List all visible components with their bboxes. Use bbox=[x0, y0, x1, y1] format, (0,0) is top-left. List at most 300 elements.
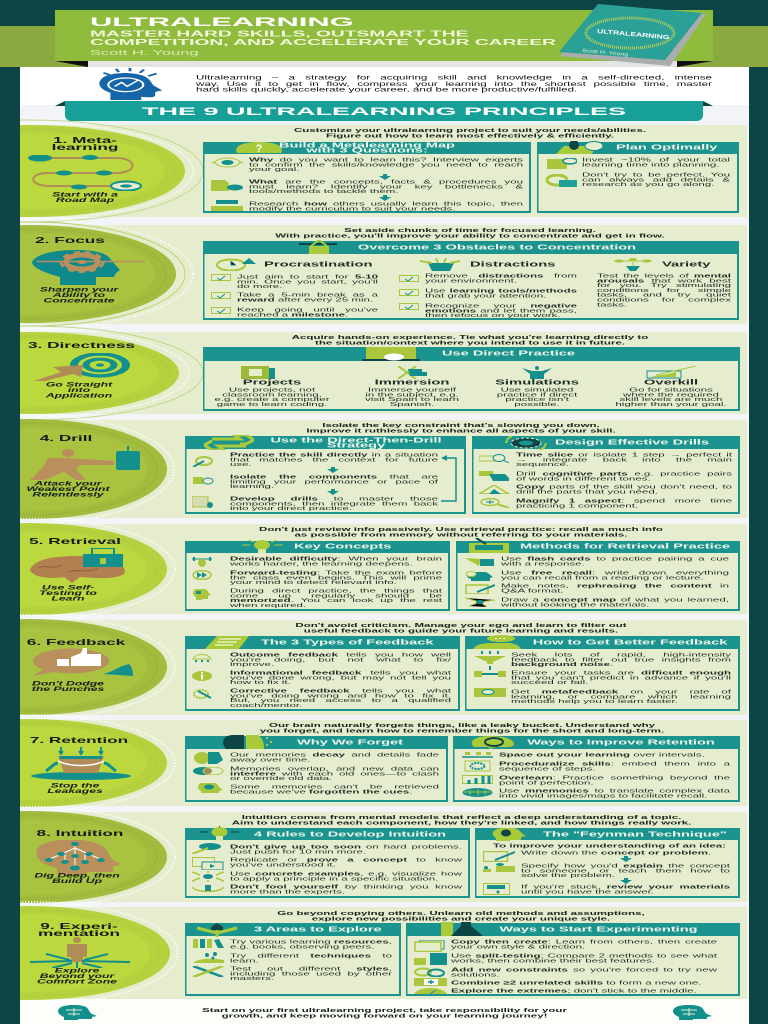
concept bbox=[230, 570, 442, 585]
icon: video screens bbox=[192, 857, 224, 870]
rule bbox=[230, 872, 462, 881]
icon: laptop and hand bbox=[362, 347, 420, 361]
arrow bbox=[379, 195, 391, 201]
drill tip bbox=[516, 472, 732, 481]
why: to confirm the skills/knowledge you need to reach bbox=[249, 161, 523, 167]
icon: triangle bbox=[479, 485, 510, 494]
icon: recall head bbox=[465, 571, 495, 581]
why: Why do you want to learn this? Interview experts bbox=[249, 156, 523, 162]
caption: Road Map bbox=[56, 197, 114, 204]
concept: the class even begins. This will prime bbox=[230, 574, 442, 580]
panel title: Overcome 3 Obstacles to Concentration bbox=[358, 243, 636, 251]
isolate step: limiting your performance or pace of bbox=[230, 478, 438, 484]
step: Write down the concept or problem. bbox=[521, 850, 711, 856]
section summary: the situation/context where you intend to use it in future. bbox=[315, 340, 625, 346]
tip: that grab your attention. bbox=[425, 292, 546, 298]
icon: immersion bbox=[396, 366, 427, 379]
rule bbox=[230, 884, 462, 894]
subtitle bbox=[90, 29, 556, 47]
projects heading: Projects bbox=[243, 378, 301, 386]
icon: isolate bbox=[193, 476, 215, 486]
research: Research how others usually learn this topic, then bbox=[249, 200, 523, 206]
method: with a response. bbox=[501, 560, 585, 566]
caption bbox=[0, 783, 155, 795]
tip: methods help you to learn faster. bbox=[511, 698, 678, 704]
icon: gear steps bbox=[462, 760, 493, 772]
drill tip: Magnify 1 aspect: spend more time bbox=[516, 498, 732, 504]
overkill heading: Overkill bbox=[644, 378, 698, 386]
panel title: Use the Direct-Then-Drill bbox=[270, 436, 442, 444]
icon: thumbs up bubble bbox=[33, 648, 133, 676]
area: masters. bbox=[230, 975, 274, 981]
section summary: Acquire hands-on experience. Tie what you're learning directly to bbox=[292, 335, 648, 341]
icon: dial bbox=[414, 988, 447, 994]
area bbox=[230, 954, 392, 963]
principle title: 5. Retrieval bbox=[29, 536, 121, 545]
area: Try different techniques to bbox=[230, 952, 392, 958]
practice step: Practice the skill directly in a situation bbox=[230, 452, 438, 458]
tip bbox=[511, 652, 731, 667]
method: Use free recall: write down everything bbox=[501, 570, 729, 576]
reason: because we've forgotten the cues. bbox=[230, 788, 412, 794]
perfection: can always add details & bbox=[582, 177, 730, 183]
arrow bbox=[620, 856, 632, 862]
panel: retrieval methods bbox=[456, 541, 740, 611]
invest: Invest ~10% of your total bbox=[582, 156, 730, 162]
way bbox=[451, 940, 717, 949]
caption bbox=[0, 481, 148, 498]
book cover: ULTRALEARNING bbox=[597, 27, 670, 41]
method: point of perfection. bbox=[499, 779, 594, 785]
icon: boxer and bag bbox=[30, 446, 140, 480]
rule: Don't give up too soon on hard problems. bbox=[230, 844, 462, 850]
drill tip: Copy parts of the skill you don't need, to bbox=[516, 484, 732, 490]
simulations text: practice if direct bbox=[497, 391, 577, 397]
icon: test sheet bbox=[468, 538, 510, 553]
feedback type: improve. bbox=[230, 661, 274, 667]
feedback type: But, you need access to a qualified bbox=[230, 697, 451, 703]
section summary: Don't avoid criticism. Manage your ego and learn to filter out bbox=[295, 623, 627, 629]
tip: Remove distractions from bbox=[425, 272, 577, 278]
caption: Dig Deep, then bbox=[34, 872, 120, 879]
method: Q&A format. bbox=[501, 587, 564, 593]
icon: plant bbox=[299, 240, 337, 254]
icon: document bbox=[211, 180, 243, 191]
tip bbox=[237, 292, 378, 303]
section summary: Our brain naturally forgets things, like a leaky bucket. Understand why bbox=[269, 723, 655, 729]
tip: Just aim to start for 5-10 bbox=[237, 274, 378, 280]
principle 3: directness bbox=[20, 332, 747, 414]
variety text: tasks. bbox=[597, 301, 627, 307]
tip: feedback to filter out true insights from bbox=[511, 656, 731, 662]
why: your goal. bbox=[249, 166, 300, 172]
drill tip bbox=[516, 452, 732, 467]
panel title bbox=[279, 141, 455, 154]
lead-in: To improve your understanding of an idea: bbox=[493, 842, 726, 848]
section summary bbox=[294, 128, 646, 139]
area: e.g. books, observing peers. bbox=[230, 943, 374, 949]
projects text: game to learn coding. bbox=[217, 401, 327, 407]
section summary: Aim to understand each component, how they're linked, and how things really work. bbox=[232, 820, 691, 826]
caption bbox=[0, 968, 157, 985]
panel: obstacles to concentration bbox=[203, 241, 739, 320]
simulations text: possible. bbox=[514, 401, 560, 407]
simulations text bbox=[472, 388, 602, 407]
icon: simulations bbox=[520, 366, 554, 379]
reason: interfere with each old ones—to clash bbox=[230, 770, 439, 776]
feedback type: you've doing wrong and how to fix it. bbox=[230, 692, 451, 698]
heading: Procrastination bbox=[264, 260, 373, 268]
rule bbox=[230, 858, 462, 867]
closing message bbox=[134, 1008, 634, 1018]
section summary: useful feedback to guide your future learning and results. bbox=[304, 628, 618, 634]
method bbox=[499, 762, 730, 771]
invest: learning time into planning. bbox=[582, 161, 719, 167]
icon: balancing person bbox=[192, 885, 224, 893]
step bbox=[521, 864, 730, 878]
isolate step: Isolate the components that are bbox=[230, 474, 438, 480]
tip: Recognize your negative bbox=[425, 302, 577, 308]
checkbox bbox=[211, 292, 231, 299]
projects text: e.g. create a computer bbox=[214, 396, 330, 402]
caption bbox=[52, 191, 118, 204]
tip: background noise. bbox=[511, 661, 613, 667]
drill tip: sequence. bbox=[516, 461, 569, 467]
icon: cycle arrows bbox=[204, 435, 254, 450]
research bbox=[249, 200, 523, 212]
variety text: tasks, and try quiet bbox=[597, 292, 731, 298]
section summary: Customize your ultralearning project to suit your needs/abilities. bbox=[294, 128, 646, 134]
caption bbox=[0, 585, 148, 602]
icon: split test bbox=[414, 953, 447, 965]
panel: improve retention bbox=[453, 736, 740, 802]
caption: Explore bbox=[55, 967, 99, 974]
icon: basket bbox=[420, 258, 460, 271]
panel title: Why We Forget bbox=[297, 738, 403, 746]
tip bbox=[425, 304, 577, 318]
principle 6: feedback bbox=[20, 620, 747, 715]
tip: min. Once you start, you'll bbox=[237, 278, 378, 284]
icon: copy bbox=[414, 940, 447, 952]
reason: away over time. bbox=[230, 756, 311, 762]
feedback type bbox=[230, 688, 451, 708]
panel title: Design Effective Drills bbox=[555, 438, 709, 446]
icon: brain bbox=[462, 788, 493, 798]
intro text: way. Use it to get in flow, compress your learning into the shortest possible time, master bbox=[196, 80, 712, 87]
tip: then refocus on your work. bbox=[425, 312, 561, 318]
principle 9: experimentation bbox=[20, 907, 747, 999]
tip: emotions and let them pass, bbox=[425, 307, 577, 313]
icon: target bbox=[212, 158, 243, 168]
caption bbox=[0, 681, 148, 693]
caption: Use Self- bbox=[42, 584, 94, 591]
checkbox bbox=[399, 303, 419, 310]
panel: areas to explore bbox=[185, 923, 401, 996]
icon: cognitive parts bbox=[479, 471, 510, 481]
drill tip: Time slice or isolate 1 step → perfect it bbox=[516, 452, 732, 458]
icon: fast forward bbox=[192, 570, 212, 580]
icon: lightbulb bbox=[200, 826, 239, 841]
tip: Seek lots of rapid, high-intensity bbox=[511, 652, 731, 658]
feedback type: Corrective feedback tells you what bbox=[230, 688, 451, 694]
step: Specify how you'd explain the concept bbox=[521, 862, 730, 868]
icon: overlap bbox=[193, 767, 224, 775]
method bbox=[499, 776, 730, 785]
rule: more than the experts. bbox=[230, 888, 345, 894]
caption: Learn bbox=[51, 596, 85, 603]
rule: Just push for 10 min more. bbox=[230, 848, 366, 854]
panel title bbox=[256, 438, 456, 448]
reason: Some memories can't be retrieved bbox=[230, 784, 439, 790]
perfection bbox=[582, 172, 730, 188]
icon: projects bbox=[241, 366, 275, 379]
drill tip: drill the parts that you need. bbox=[516, 488, 658, 494]
section summary bbox=[275, 228, 665, 239]
section summary bbox=[220, 335, 720, 346]
caption: Comfort Zone bbox=[37, 979, 117, 986]
rule: Replicate or prove a concept to know bbox=[230, 856, 462, 862]
concept bbox=[230, 588, 442, 608]
method: Space out your learning over intervals. bbox=[499, 752, 705, 758]
icon: overkill bbox=[646, 366, 696, 379]
drill tip: of words in different tones. bbox=[516, 475, 651, 481]
area: including those used by other bbox=[230, 970, 392, 976]
book cover bbox=[559, 4, 706, 66]
icon: books bbox=[193, 939, 224, 948]
principle 5: retrieval bbox=[20, 524, 747, 614]
section summary: Figure out how to learn most effectively & efficiently. bbox=[326, 133, 614, 139]
icon: footer head right bbox=[671, 1005, 712, 1020]
caption: Application bbox=[46, 393, 112, 400]
icon: time slice bbox=[479, 453, 510, 463]
section summary: Don't just review info passively. Use retrieval practice: recall as much info bbox=[259, 527, 663, 533]
title banner bbox=[55, 10, 713, 61]
panel title: Build a Metalearning Map bbox=[279, 141, 455, 149]
icon: person and arrows bbox=[30, 937, 130, 968]
way: solutions. bbox=[451, 971, 500, 977]
method: Use flash cards to practice pairing a cue bbox=[501, 556, 729, 562]
panel title: Plan Optimally bbox=[616, 144, 717, 152]
caption: Go Straight bbox=[46, 381, 112, 388]
simulations text: Use simulated bbox=[501, 386, 573, 392]
rule: Use concrete examples, e.g. visualize how bbox=[230, 870, 462, 876]
overkill text: higher than your goal. bbox=[615, 401, 727, 407]
caption: Weakest Point bbox=[26, 486, 110, 493]
feedback type: Informational feedback tells you what bbox=[230, 670, 451, 676]
step: until you have the answer. bbox=[521, 888, 654, 894]
concept bbox=[230, 556, 442, 566]
tip: Use learning tools/methods bbox=[425, 288, 577, 294]
arrow bbox=[620, 878, 632, 884]
method: without looking the materials. bbox=[501, 601, 649, 607]
section summary bbox=[211, 527, 711, 538]
panel title: Methods for Retrieval Practice bbox=[520, 543, 730, 551]
area: Try various learning resources, bbox=[230, 938, 392, 944]
perfection: research as you go along. bbox=[582, 182, 714, 188]
section summary: Isolate the key constraint that's slowing you down. bbox=[322, 423, 600, 429]
immersion text: in the subject, e.g. bbox=[365, 391, 459, 397]
method: Use mnemonics to translate complex data bbox=[499, 788, 730, 794]
icon: hand with molecules bbox=[193, 952, 224, 963]
principles heading: THE 9 ULTRALEARNING PRINCIPLES bbox=[142, 105, 626, 117]
caption: Stop the bbox=[51, 782, 99, 789]
overkill text: Go for situations bbox=[629, 386, 713, 392]
area bbox=[230, 966, 392, 981]
caption: Ability to bbox=[53, 292, 105, 299]
way bbox=[451, 954, 717, 963]
way: Use split-testing: Compare 2 methods to see what bbox=[451, 952, 717, 958]
icon: head with cue bbox=[193, 783, 224, 793]
why bbox=[249, 156, 523, 172]
method bbox=[499, 788, 730, 798]
reason: Our memories decay and details fade bbox=[230, 752, 439, 758]
section summary bbox=[211, 911, 711, 922]
icon: brain and box bbox=[30, 548, 126, 583]
drill tip: → integrate back into the main bbox=[516, 456, 732, 462]
variety text: arousals that work best bbox=[597, 277, 731, 283]
caption: into bbox=[68, 387, 90, 394]
icon: gears and book bbox=[556, 141, 602, 154]
panel title: with 3 Questions: bbox=[306, 146, 428, 154]
intro text bbox=[196, 74, 712, 93]
tip bbox=[425, 272, 577, 284]
closing message: Start on your first ultralearning project, take responsibility for your bbox=[202, 1007, 567, 1013]
section summary: Intuition comes from mental models that reflect a deep understanding of a topic. bbox=[242, 815, 681, 821]
icon: funnel bbox=[474, 651, 506, 670]
practice step: use. bbox=[230, 461, 252, 467]
simulations text: practice isn't bbox=[505, 396, 569, 402]
reason bbox=[230, 784, 439, 794]
concept: During direct practice, the things that bbox=[230, 588, 442, 594]
drill tip bbox=[516, 498, 732, 508]
method: Overlearn: Practice something beyond the bbox=[499, 774, 730, 780]
caption: Start with a bbox=[52, 191, 118, 198]
what: must learn? Identify your key bottlenecks & bbox=[249, 183, 523, 189]
section summary: as possible from memory without referring to your materials. bbox=[295, 532, 627, 538]
method: Draw a concept map of what you learned, bbox=[501, 596, 729, 602]
tip: Keep going until you've bbox=[237, 306, 378, 312]
icon: crossed pen and brush bbox=[193, 966, 224, 977]
arrow bbox=[379, 174, 391, 180]
icon: leaky bucket bbox=[30, 747, 132, 780]
way: your own style & direction. bbox=[451, 943, 585, 949]
icon: gauge bbox=[192, 653, 212, 662]
icon: gear bbox=[504, 436, 548, 450]
method: Proceduralize skills: embed them into a bbox=[499, 760, 730, 766]
method bbox=[501, 570, 729, 580]
panel title: 4 Rules to Develop Intuition bbox=[254, 830, 446, 838]
caption: the Punches bbox=[32, 686, 104, 693]
tip: Get metafeedback on your rate of bbox=[511, 688, 731, 694]
panel: types of feedback bbox=[185, 636, 460, 711]
section summary: explore new possibilities and create your unique style. bbox=[312, 916, 610, 922]
concept: works harder, the learning deepens. bbox=[230, 560, 413, 566]
icon: question bubble bbox=[236, 142, 282, 154]
icon: arrows converge bbox=[192, 871, 224, 882]
method bbox=[501, 556, 729, 566]
immersion heading: Immersion bbox=[375, 378, 449, 386]
drill tip bbox=[516, 484, 732, 494]
icon: magnifier bbox=[479, 498, 510, 508]
panel: direct practice bbox=[203, 347, 740, 411]
checkbox bbox=[211, 307, 231, 314]
icon: clock bbox=[216, 258, 256, 271]
panel: start experimenting bbox=[406, 923, 740, 996]
principle title: 1. Meta- bbox=[53, 135, 117, 144]
icon: push boulder bbox=[192, 843, 224, 854]
immersion text: visit Spain to learn bbox=[365, 396, 459, 402]
tip: reached a milestone. bbox=[237, 311, 348, 317]
panel: feynman technique bbox=[475, 828, 740, 898]
principle title: 9. Experi- bbox=[40, 921, 118, 930]
principle title: 2. Focus bbox=[35, 235, 105, 244]
method bbox=[501, 598, 729, 607]
icon: info bbox=[192, 671, 212, 681]
icon: head with bulb bbox=[490, 828, 527, 841]
principle title: mentation bbox=[38, 928, 120, 937]
icon: notebook bbox=[547, 158, 577, 169]
principle title bbox=[9, 923, 149, 936]
practice step: that matches the context for future bbox=[230, 456, 438, 462]
variety text: Test the levels of mental bbox=[597, 272, 731, 278]
isolate step: learning. bbox=[230, 483, 274, 489]
icon: explain bbox=[483, 863, 515, 872]
icon: write bbox=[483, 851, 515, 862]
way: Copy then create: Learn from others, then create bbox=[451, 938, 717, 944]
concept: come up regularly should be bbox=[230, 592, 442, 598]
variety text: for you. Try stimulating bbox=[597, 282, 731, 288]
develop step: into your direct practice. bbox=[230, 505, 352, 511]
principles heading bbox=[65, 101, 703, 121]
icon: head with gear bbox=[32, 250, 145, 285]
panel title: Key Concepts bbox=[294, 543, 391, 551]
icon: bulb bbox=[242, 540, 283, 553]
tip bbox=[511, 690, 731, 704]
arrow bbox=[327, 489, 339, 495]
icon: clipboard bbox=[192, 496, 214, 508]
method: into vivid images/maps to facilitate recall. bbox=[499, 792, 707, 798]
feedback type: Outcome feedback tells you how well bbox=[230, 652, 451, 658]
what bbox=[249, 178, 523, 194]
closing message: growth, and keep moving forward on your learning journey! bbox=[222, 1012, 547, 1018]
caption: Don't Dodge bbox=[32, 680, 104, 687]
icon: combine bbox=[414, 978, 447, 986]
reason bbox=[230, 752, 439, 762]
concept: when required. bbox=[230, 602, 306, 608]
tip: learning, or compare which learning bbox=[511, 693, 731, 699]
method bbox=[501, 584, 729, 593]
invest bbox=[582, 156, 730, 168]
method: sequence of steps. bbox=[499, 765, 596, 771]
concept: your mind to detect relevant info. bbox=[230, 579, 397, 585]
step: solve the problem. bbox=[521, 872, 615, 878]
panel: rules for intuition bbox=[185, 828, 470, 898]
intro text: hard skills quickly, accelerate your career, and be more productive/fulfilled. bbox=[196, 86, 577, 93]
feedback type: coach/mentor. bbox=[230, 702, 302, 708]
overkill text bbox=[606, 388, 736, 407]
way bbox=[451, 968, 717, 977]
section summary: Set aside chunks of time for focused learning. bbox=[344, 228, 596, 234]
caption bbox=[0, 382, 159, 399]
overkill text: where the required bbox=[623, 391, 719, 397]
caption: Concentrate bbox=[43, 298, 115, 305]
develop step bbox=[230, 496, 438, 511]
caption bbox=[40, 286, 119, 305]
icon: flask bbox=[441, 922, 485, 936]
method: you can recall from a reading or lecture. bbox=[501, 574, 704, 580]
what: What are the concepts, facts & procedures you bbox=[249, 178, 523, 184]
checkbox bbox=[211, 274, 231, 281]
